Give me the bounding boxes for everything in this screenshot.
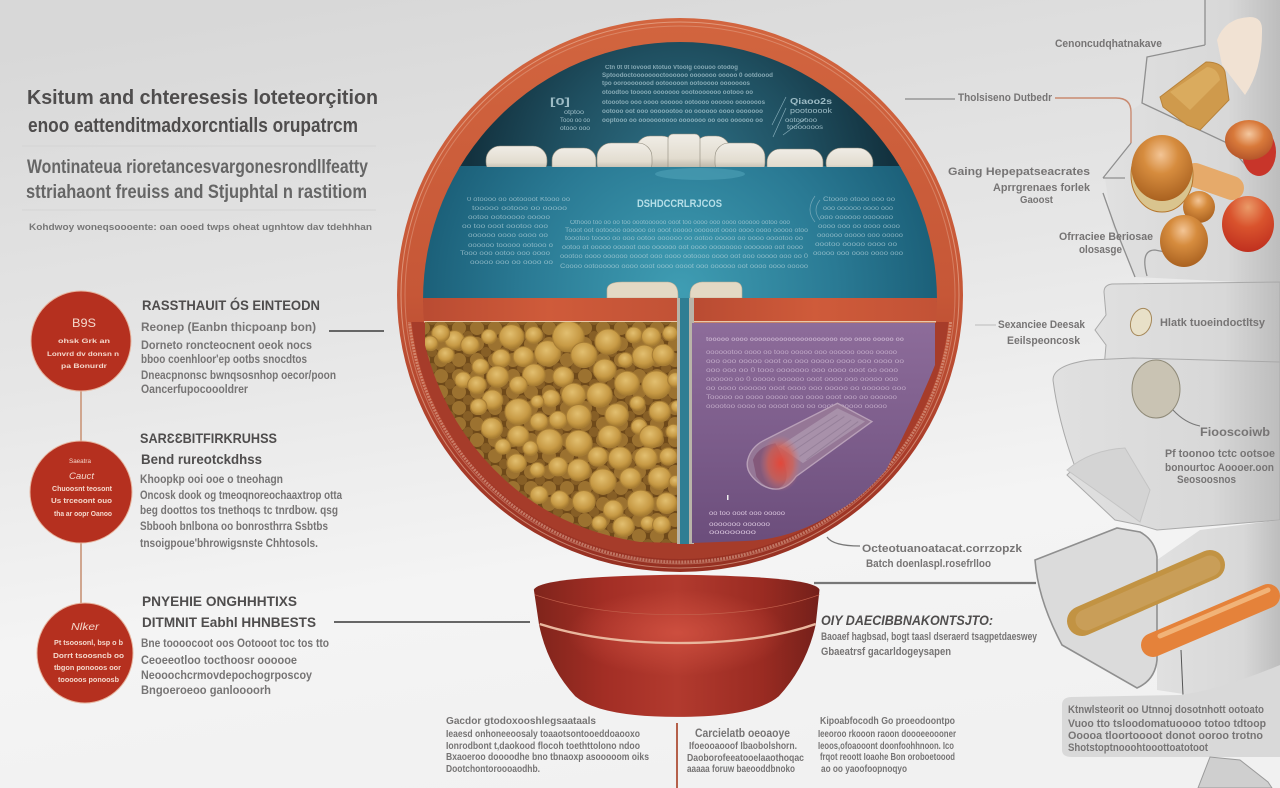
- panel: left item 2: [30, 430, 342, 550]
- left paragraph: oooooo oooo oooo oo: [468, 233, 549, 239]
- bottom corner shape: [1198, 757, 1272, 788]
- outline strokes: [1103, 0, 1250, 277]
- small right note: pootooook: [790, 108, 833, 115]
- purple text: ooootoo oooo oo oooot ooo oo ooot oooooo ooooo: [706, 404, 888, 410]
- connector 1: [329, 330, 384, 332]
- bowl connector line: [814, 582, 1036, 584]
- icon: red cup: [1242, 128, 1276, 176]
- purple text: tooooo oooo ooooooooooooooooooooo ooo oooo ooooo oo: [706, 337, 904, 343]
- bottom right text: [818, 715, 956, 775]
- label: 5: Sexanciee Deesak: [998, 319, 1086, 331]
- bottom right text: Kipoabfocodh Go proeodoontpo: [820, 715, 955, 727]
- small right note: [772, 97, 833, 137]
- top paragraph: ootooo oot ooo ooooootoo oo oooooo oooo ooooooo: [602, 109, 763, 115]
- body 2: tnsoigpoue'bhrowigsnste Chhtosols.: [140, 536, 318, 550]
- body 1: bboo coenhloor'ep ootbs snocdtos: [141, 352, 307, 366]
- icon: orange sphere upper right: [1225, 120, 1273, 160]
- center teal strip: [677, 298, 694, 544]
- bowl illustration: [534, 575, 820, 717]
- panel: bottom right text box: Ooooa tloortoooot donot ooroo trotno: [1068, 730, 1263, 742]
- loaf tray: [1035, 528, 1157, 688]
- heading 2: SARƐƐBITFIRKRUHSS: [140, 430, 277, 446]
- body 3: Bngoeroeoo ganloooorh: [141, 683, 271, 697]
- label: 7: [1165, 425, 1275, 486]
- right paragraph: oootoo ooooo oooo oo: [815, 242, 898, 248]
- heading 1: RASSTHAUIT ÓS EINTEODN: [142, 296, 320, 313]
- inner fold: [1067, 448, 1150, 522]
- body 3: [141, 636, 329, 697]
- label: 8: Octeotuanoatacat.corrzopzk: [862, 543, 1023, 555]
- block highlight: [1170, 67, 1220, 110]
- connector 3: [334, 621, 530, 623]
- badge 2: [30, 441, 132, 543]
- label: 5: Eeilspeoncosk: [1007, 335, 1081, 347]
- small purple note: ooooooo oooooo: [709, 522, 771, 528]
- bottom right text: frqot reoott Ioaohe Bon oroboetoood: [820, 751, 955, 763]
- purple text: ooo ooo oo 0 tooo ooooooo ooo oooo ooot oo oooo: [706, 368, 899, 374]
- icon: lower pills: [607, 282, 742, 298]
- center paragraph: Othooo too oo oo too oootoooooo ooot too oooo ooo oooo oooooo ootoo ooo: [570, 220, 791, 226]
- badge 1: ohsk Grk an: [58, 338, 110, 345]
- icon: golden block: [1160, 62, 1229, 130]
- small left note: otooo ooo: [560, 126, 591, 132]
- bottom right text: Ieeoroo rkooon raoon doooeeoooner: [818, 728, 956, 740]
- bottom left text: Bxaoeroo doooodhe bno tbnaoxp asooooom oiks: [446, 751, 649, 763]
- top paragraph: ooptooo oo oooooooooo ooooooo oo ooo oooooo oo: [602, 118, 763, 124]
- badge 1: B9S: [72, 316, 96, 330]
- label: 3: Gaoost: [1020, 195, 1054, 206]
- bottom left text: Dootchontoroooaodhb.: [446, 763, 540, 775]
- body 1: Dneacpnonsc bwnqsosnhop oecor/poon: [141, 368, 336, 382]
- label: 7: Fiooscoiwb: [1200, 425, 1270, 439]
- label: 6: Hlatk tuoeindoctltsy: [1160, 317, 1266, 329]
- label: 7: bonourtoc Aoooer.oon: [1165, 462, 1274, 474]
- label: 4: Ofrraciee Beriosae: [1059, 231, 1153, 243]
- right paragraph: oooo ooo oo oooo oooo: [818, 224, 901, 230]
- center paragraph: [560, 220, 809, 270]
- small left note: otptoo: [564, 110, 585, 116]
- teal panel text: [460, 65, 904, 270]
- icon: silver seed: [1132, 360, 1180, 418]
- small purple note: oo too ooot ooo ooooo: [709, 511, 786, 517]
- center paragraph: Tooot oot ootoooo oooooo oo ooot ooooo oooooot oooo oooo oooo ooooo otoo: [565, 228, 809, 234]
- panel heading: DSHDCCRLRJCOS: [637, 198, 722, 210]
- left paragraph: ooooo ooo oo oooo oo: [470, 260, 554, 266]
- small right note: tooooooos: [787, 125, 823, 131]
- label: 7: Pf toonoo tctc ootsoe: [1165, 448, 1275, 460]
- timeline connectors: [80, 388, 82, 604]
- label: 3: Gaing Hepepatseacrates: [948, 166, 1090, 178]
- panel: beans image: [423, 321, 683, 544]
- badge 1: Lonvrd dv donsn n: [47, 351, 119, 358]
- subtitle: [26, 157, 368, 203]
- body 1: Oancerfupocoooldrer: [141, 382, 248, 396]
- bottom right text: Ieoos,ofoaooont doonfoohhnoon. Ico: [818, 740, 954, 752]
- badge 3: Pt tsoosonl, bsp o b: [54, 640, 123, 647]
- header text block: [22, 87, 378, 232]
- heading 2: [140, 430, 277, 467]
- left paragraph: ootoo ootooooo ooooo: [468, 215, 551, 221]
- purple text: oooooo oo 0 ooooo oooooo ooot oooo ooo ooooo ooo: [706, 377, 899, 383]
- purple text: ooooootoo oooo oo tooo ooooo ooo oooooo oooo ooooo: [706, 350, 898, 356]
- left paragraph: oo too ooot oootoo ooo: [462, 224, 549, 230]
- purple text: oo oooo oooooo ooot oooo ooo ooooo oo oooooo ooo: [706, 386, 907, 392]
- badge 2: Chuoosnt teosont: [52, 486, 113, 493]
- heading 3: PNYEHIE ONGHHHTIXS: [142, 593, 297, 609]
- badge 3: Nlker: [71, 622, 100, 633]
- right paragraph: oooooo ooooo ooo ooooo: [817, 233, 904, 239]
- label: 7: Seosoosnos: [1177, 474, 1236, 486]
- body: [821, 631, 1038, 658]
- bottom center text: [687, 726, 804, 775]
- center paragraph: oootoo oooo oooooo oooot ooo oooo ootoooo oooo oot ooo ooooo ooo oo 0: [560, 254, 809, 260]
- badge 1: pa Bonurdr: [61, 363, 108, 370]
- small right note: Qiaoo2s: [790, 97, 833, 106]
- text block: center right: [821, 612, 1038, 658]
- icon: orange sausage: [1153, 590, 1268, 645]
- badge 2: tha ar oopr Oanoo: [54, 511, 112, 518]
- purple text: Tooooo oo oooo ooooo ooo oooo ooot ooo oo oooooo: [706, 395, 898, 401]
- panel: purple section: [692, 323, 936, 545]
- badge 2: Saeatra: [69, 459, 92, 465]
- thin strut: [1181, 650, 1183, 695]
- icon: tan capsule: [1195, 175, 1232, 188]
- heading 2: Bend rureotckdhss: [141, 451, 262, 467]
- top paragraph: tpo ooroooooood ootooooon ootooooo ooooooos: [602, 81, 751, 87]
- purple text: [706, 337, 907, 410]
- right labels: [862, 38, 1275, 570]
- label with leader: 2: [905, 92, 1131, 143]
- body 3: Ceoeeotloo tocthoosr oooooe: [141, 653, 297, 667]
- title: [27, 87, 378, 137]
- bottom left text: Ieaesd onhoneeoosaly toaaotsontooeddoaooxo: [446, 728, 640, 740]
- label: 4: [1059, 231, 1153, 256]
- lower gray block: [1053, 358, 1280, 530]
- left paragraph: Tooo ooo ootoo ooo oooo: [460, 251, 551, 257]
- seed leader line: [1173, 410, 1200, 426]
- left paragraph: tooooo ootooo oo ooooo: [472, 206, 568, 212]
- icon: row of white pills: [486, 134, 874, 167]
- left paragraph: oooooo tooooo ootooo o: [468, 243, 554, 249]
- body 2: [140, 472, 342, 550]
- bottom left text: [446, 715, 649, 775]
- title: Ksitum and chteresesis loteteorçition: [27, 87, 378, 109]
- orange divider bands: [420, 298, 938, 322]
- top paragraph: Sptoodoctoooooooctoooooo ooooooo ooooo 0 ootdoood: [602, 73, 773, 79]
- upper gray mass: [1105, 0, 1280, 284]
- body 1: Reonep (Eanbn thicpoanp bon): [141, 320, 316, 334]
- center paragraph: ootoo ot ooooo ooooot ooo oooooo oot oooo oooooooo ooooooo oot oooo: [562, 245, 804, 251]
- bottom left text: Ionrodbont t,daokood flocoh toethttolono ndoo: [446, 740, 640, 752]
- icon: small sphere: [1183, 191, 1215, 223]
- title: enoo eattenditmadxorcntialls orupatrcm: [28, 115, 358, 137]
- callout: rim leader line: [827, 537, 860, 546]
- top paragraph: otoodtoo tooooo ooooooo oootooooooo ootooo oo: [602, 90, 753, 96]
- body 3: Neooochcrmovdepochogrposcoy: [141, 668, 312, 682]
- small left note: [550, 97, 591, 132]
- body 2: Sbbooh bnlbona oo bonrosthrra Ssbtbs: [140, 519, 328, 533]
- right paragraph: [810, 196, 904, 257]
- bottom text blocks: [446, 715, 956, 788]
- label: 5: [975, 319, 1086, 347]
- base gray mass: [1157, 520, 1280, 700]
- label: 8: Batch doenlaspl.rosefrlloo: [866, 558, 991, 570]
- top paragraph: [602, 65, 773, 124]
- body: Gbaeatrsf gacarldogeysapen: [821, 646, 951, 658]
- badge 3: Dorrt tsoosncb oo: [53, 653, 124, 660]
- center paragraph: toootoo toooo oo ooo ootoo oooooo oo ootoo ooooo oo oooo ooootoo oo: [565, 236, 804, 242]
- top paragraph: otoootoo ooo oooo oooooo ootoooo oooooo ooooooos: [602, 100, 766, 106]
- icon: red sphere: [1222, 196, 1274, 252]
- right paragraph: Ctoooo otooo ooo oo: [823, 197, 896, 203]
- panel: left item 3: [37, 593, 530, 703]
- label: 3: Aprrgrenaes forlek: [993, 182, 1091, 194]
- bottom center text: Daoborofeeatooelaaothoqac: [687, 752, 804, 764]
- badge 2: Cauct: [69, 471, 95, 481]
- bottom left text: Gacdor gtodoxooshlegsaataals: [446, 715, 596, 727]
- bottom center text: Carcielatb oeoaoye: [695, 726, 790, 740]
- body 2: Khoopkp ooi ooe o tneohagn: [140, 472, 283, 486]
- icon: medium gold sphere: [1160, 215, 1208, 267]
- center paragraph: Coooo ootoooooo oooo ooot oooo oooot ooo oooooo oot oooo oooo ooooo: [560, 264, 809, 270]
- badge 3: tbgon ponooos oor: [54, 665, 121, 672]
- icon: cross-section of artery: [747, 403, 872, 491]
- heading 3: [142, 593, 316, 630]
- right side anatomy illustration: [1035, 0, 1280, 788]
- label: 3: [948, 166, 1091, 206]
- icon: large gold sphere: [1131, 135, 1193, 212]
- small right note: ootooooo: [785, 118, 818, 124]
- heading 3: DITMNIT Eabhl HHNBESTS: [142, 614, 316, 630]
- panel: bottom right text box: Shotstoptnooohtooottoatotoot: [1068, 742, 1208, 754]
- badge 1: [31, 291, 131, 391]
- badge 3: tooooos ponoosb: [58, 677, 119, 684]
- red divider: [676, 723, 678, 788]
- small left note: Tooo oo oo: [560, 118, 591, 124]
- bottom center text: Ifoeooaooof Ibaobolshorn.: [689, 740, 797, 752]
- left paragraph: [460, 197, 571, 266]
- label: top: Cenoncudqhatnakave: [1055, 38, 1162, 50]
- heading: OIY DAECIBBNAKONTSJTO:: [821, 612, 993, 628]
- right paragraph: ooo oooooo oooo ooo: [823, 206, 894, 212]
- outer rim: [397, 18, 963, 572]
- panel: bottom right text box: [1062, 665, 1280, 757]
- body 2: beg doottos tos tnethoqs tc tnrdbow. qsg: [140, 503, 338, 517]
- small purple note: ooooooooo: [709, 530, 757, 536]
- label: 8: [862, 543, 1023, 570]
- purple text: ooo ooo ooooo ooot oo ooo ooooo oooo ooo oooo oo: [706, 359, 905, 365]
- subtitle: sttriahaont freuiss and Stjuphtal n rastitiom: [26, 182, 367, 203]
- panel: left item 1: [31, 291, 384, 396]
- bottom center text: aaaaa foruw baeooddbnoko: [687, 763, 795, 775]
- bottom right text: ao oo yaoofoopnoqyo: [821, 763, 907, 775]
- small left note: [0]: [550, 97, 570, 108]
- icon: cream blob: [1217, 17, 1262, 95]
- badge 2: Us trceoont ouo: [51, 498, 112, 505]
- body: Baoaef hagbsad, bogt taasl dseraerd tsagpetdaeswey: [821, 631, 1038, 643]
- badge 3: [37, 603, 133, 703]
- label with leader: 2: Tholsiseno Dutbedr: [958, 92, 1053, 104]
- subtitle: Wontinateua rioretancesvargonesrondllfeatty: [27, 157, 368, 178]
- central circle diagram: [397, 18, 963, 572]
- lower inner rim band: [408, 322, 952, 564]
- panel: bottom right text box: Vuoo tto tsloodomatuoooo totoo tdtoop: [1068, 718, 1266, 730]
- tagline: Kohdwoy woneqsoooente: oan ooed twps oheat ugnhtow dav tdehhhan: [29, 222, 372, 232]
- body 1: Dorneto roncteocnent oeok nocs: [141, 338, 312, 352]
- small purple note: [709, 495, 786, 536]
- icon: cream seed: [1127, 305, 1155, 339]
- right paragraph: ooooo ooo oooo oooo ooo: [813, 251, 904, 257]
- icon: golden loaf: [1082, 565, 1210, 621]
- label: 4: olosasge: [1079, 244, 1122, 256]
- left paragraph: 0 otoooo oo ootoooot Ktooo oo: [467, 197, 571, 203]
- body 3: Bne toooocoot oos Ootooot toc tos tto: [141, 636, 329, 650]
- top paragraph: Ctn 0t 0t lovood ktotuo Vtoolg coouoo otodog: [605, 65, 738, 71]
- body 1: [141, 320, 336, 396]
- panel: dark teal upper section: [420, 40, 940, 302]
- right paragraph: ooo oooooo ooooooo: [820, 215, 894, 221]
- middle gray block: [1095, 282, 1280, 370]
- body 2: Oncosk dook og tmeoqnoreochaaxtrop otta: [140, 488, 342, 502]
